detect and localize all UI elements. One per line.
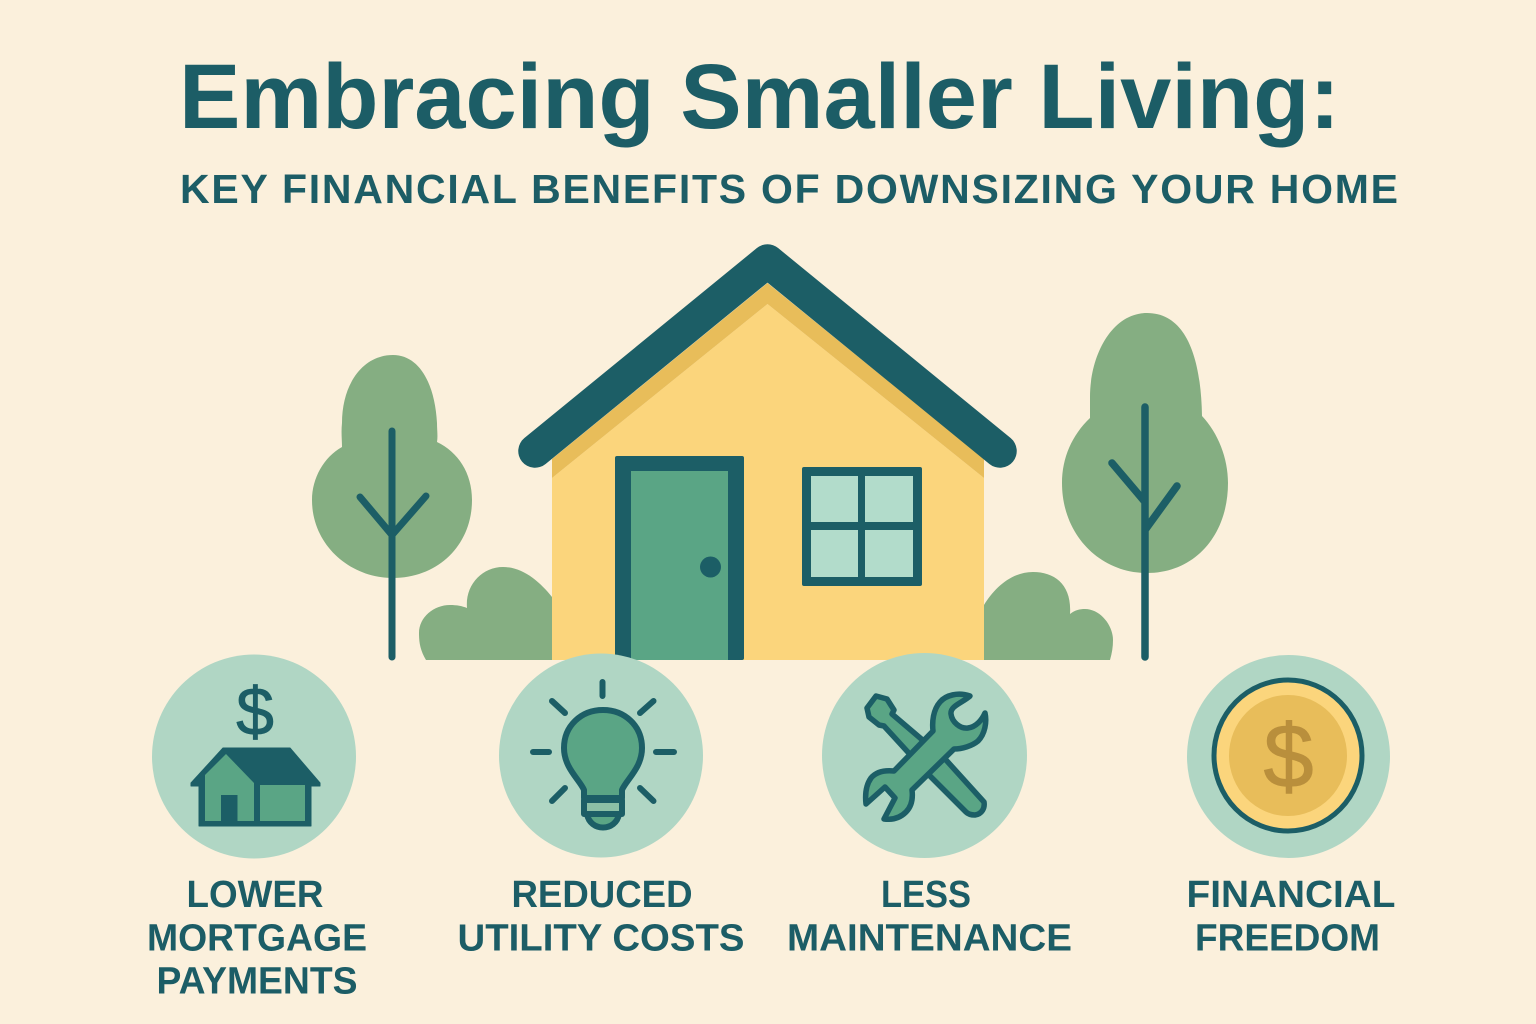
label: UTILITY COSTS xyxy=(458,918,744,960)
illustration: house xyxy=(535,261,1000,660)
icon: light bulb xyxy=(533,682,674,828)
label: REDUCED xyxy=(512,874,692,916)
icon: coin xyxy=(1214,680,1362,831)
icon: house with dollar xyxy=(191,674,320,826)
icon: coin: $ xyxy=(1263,707,1314,807)
roof xyxy=(535,261,1000,451)
label: MAINTENANCE xyxy=(787,918,1072,960)
window xyxy=(802,467,922,586)
benefit: lower mortgage payments xyxy=(147,654,367,1002)
icon: house with dollar: $ xyxy=(236,674,274,750)
label: MORTGAGE xyxy=(147,918,367,960)
title: Embracing Smaller Living: xyxy=(179,46,1340,148)
illustration: right bush xyxy=(984,572,1113,660)
roof shadow xyxy=(552,283,984,478)
benefit: financial freedom xyxy=(1186,655,1396,960)
house wall xyxy=(552,304,984,660)
door xyxy=(615,456,744,660)
illustration: left tree xyxy=(312,355,472,657)
illustration: right tree xyxy=(1062,313,1228,657)
subtitle: KEY FINANCIAL BENEFITS OF DOWNSIZING YOUR HOME xyxy=(180,166,1398,212)
label: LESS xyxy=(881,874,971,916)
label: LOWER xyxy=(186,874,324,916)
label: PAYMENTS xyxy=(156,960,358,1002)
illustration: left bush xyxy=(419,567,552,660)
label: FREEDOM xyxy=(1195,918,1380,960)
icon: wrench and screwdriver xyxy=(866,694,986,819)
benefit: reduced utility costs xyxy=(458,654,744,960)
label: FINANCIAL xyxy=(1186,874,1396,916)
benefit: less maintenance xyxy=(787,653,1072,960)
